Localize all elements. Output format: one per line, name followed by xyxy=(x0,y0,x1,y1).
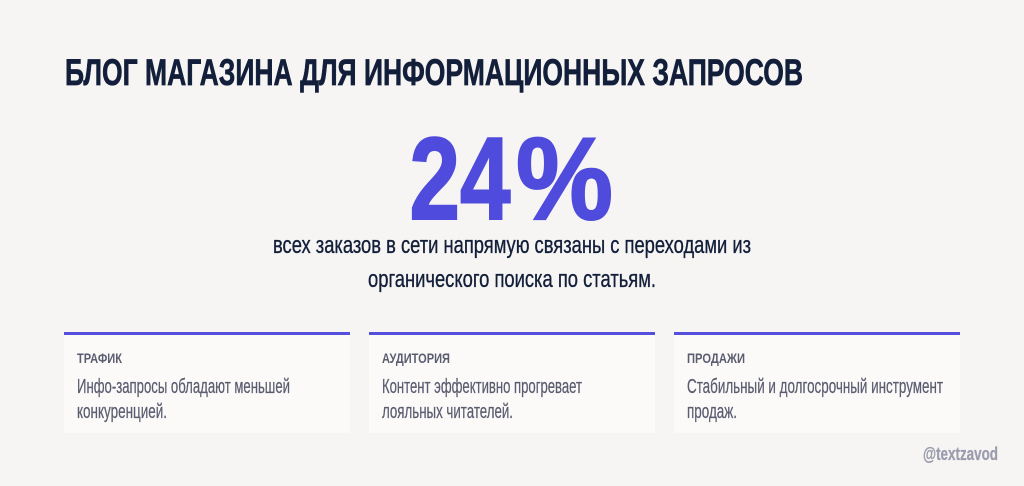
text: traffic: Инфо-запросы обладают меньшей xyxy=(77,376,290,398)
big statistic xyxy=(410,113,613,244)
heading: audience: АУДИТОРИЯ xyxy=(382,350,450,366)
panel: audience xyxy=(369,332,655,433)
heading: traffic: ТРАФИК xyxy=(77,350,122,366)
text: traffic: конкуренцией. xyxy=(77,401,167,423)
statistic description: всех заказов в сети напрямую связаны с переходами из xyxy=(273,232,751,259)
text: traffic xyxy=(77,376,290,423)
heading: sales: ПРОДАЖИ xyxy=(687,350,745,366)
panel: sales xyxy=(674,332,960,433)
text: audience: Контент эффективно прогревает xyxy=(382,376,582,398)
big statistic: 24 xyxy=(410,113,510,244)
statistic description: органического поиска по статьям. xyxy=(368,266,656,293)
panel: traffic xyxy=(64,332,350,433)
statistic description xyxy=(273,232,751,293)
text: sales: продаж. xyxy=(687,401,737,423)
text: audience: лояльных читателей. xyxy=(382,401,513,423)
big statistic: % xyxy=(516,113,613,244)
text: audience xyxy=(382,376,582,423)
text: sales xyxy=(687,376,943,423)
watermark: @textzavod xyxy=(923,444,998,464)
